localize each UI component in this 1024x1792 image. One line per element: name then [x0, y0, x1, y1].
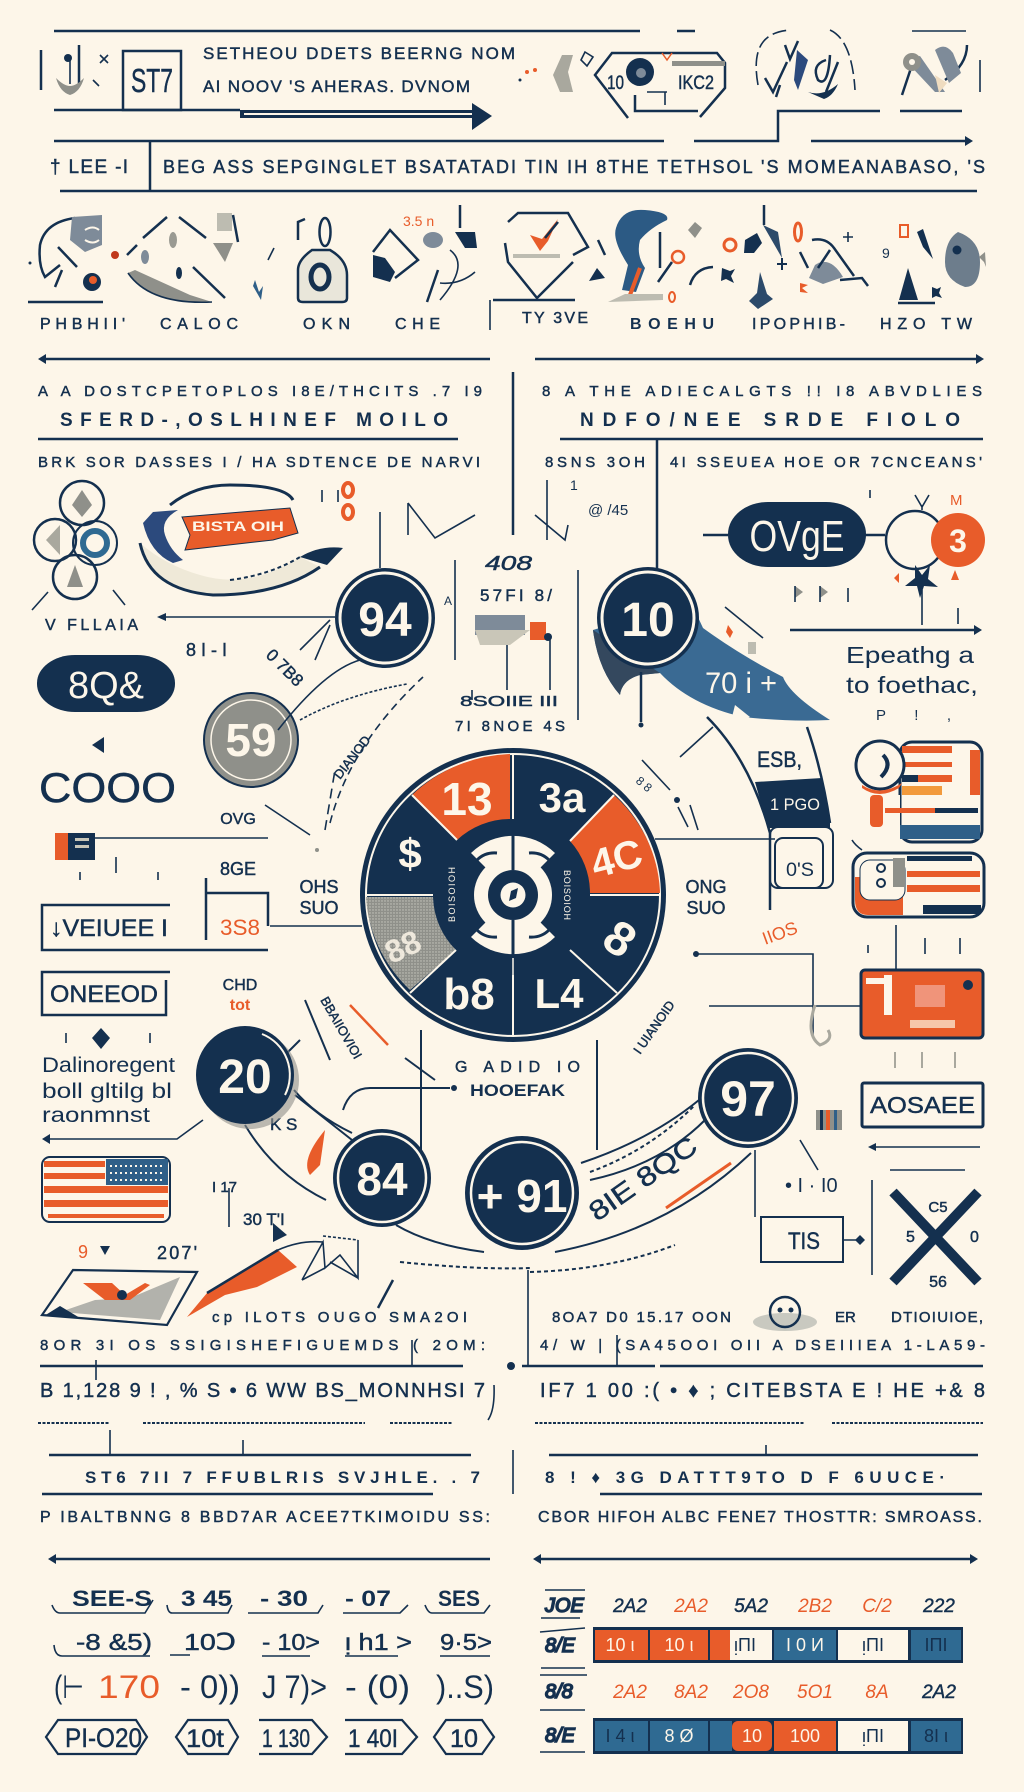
number circle: 84: [333, 1129, 431, 1227]
lower paragraph rows: 8 ! ♦ 3G DATTT9TO D F 6UUCE·: [545, 1468, 945, 1487]
wheel chart: [360, 748, 666, 1042]
lower paragraph rows: 4/ W | (SA45OOI OII A DSEIIIEA 1-LA59-: [540, 1337, 985, 1354]
number circle: 91: + 91: [477, 1170, 567, 1222]
row icons: JOE: [544, 1595, 585, 1617]
icon labels: OKN: [303, 316, 350, 333]
header labels 2: 8A: [865, 1682, 889, 1703]
icon: diamond: 3.5 n: [403, 213, 434, 229]
text: Epeathg: P ! ,: [876, 707, 951, 724]
table: left values: 10: [450, 1725, 478, 1753]
header labels 2: 5O1: [797, 1682, 833, 1703]
number circle: 10: [597, 567, 699, 728]
wheel numbers: 4C: [586, 831, 647, 887]
illustration: orange bird: [187, 1223, 393, 1317]
icon: circle cluster: [32, 481, 138, 634]
header labels 1: 5A2: [734, 1596, 768, 1617]
section headings: A A DOSTCPETOPLOS I8E/THCITS .7 I9: [38, 383, 482, 400]
blue blade: [593, 600, 830, 725]
illustration: center machine: 8SOIIE III: [460, 693, 558, 710]
small orange rings: 57FI 8/: [480, 586, 552, 605]
small flag icon: [55, 833, 158, 880]
arrow: lower left: [42, 1120, 203, 1144]
table: left values: PI-O20: [65, 1723, 142, 1753]
icon: X: 56: [929, 1274, 947, 1291]
label: orange note: IIOS: [760, 918, 800, 949]
center label: HOOEFAK: [470, 1081, 566, 1100]
row 3: 170: [98, 1669, 160, 1705]
icon: figure: [690, 205, 868, 309]
bar 2: 8I ι: [924, 1726, 948, 1746]
bar 1: 10 ι: [664, 1635, 694, 1655]
labels: OHS SUO: [299, 877, 727, 918]
arc labels: K S: [270, 1115, 297, 1134]
row 1: [52, 1586, 490, 1613]
row 3: J 7)>: [262, 1669, 327, 1705]
orange value bracket: 8GE: [220, 859, 256, 879]
small orange rings: 408: [485, 553, 532, 575]
text: paragraph: raonmnst: [42, 1104, 150, 1127]
lower paragraph rows: P IBALTBNNG 8 BBD7AR ACEE7TKIMOIDU SS:: [40, 1509, 490, 1526]
hub: BOISOIOH: [562, 870, 572, 920]
number circle: 94: [335, 568, 435, 668]
row 2: ᴉ h1 >: [345, 1629, 412, 1655]
label: cluster: V FLLAIA: [45, 617, 138, 634]
icon row: [28, 205, 986, 333]
row 2: 9·5>: [440, 1629, 492, 1655]
icon: gear figure: 9: [882, 245, 890, 261]
row 3: )..S): [436, 1669, 494, 1705]
number circle: 10: 10: [621, 594, 675, 647]
bar 2: 10: [742, 1726, 762, 1746]
icon: anchor: [41, 45, 108, 95]
icon labels: PHBHII': [40, 316, 125, 333]
card: top: [856, 741, 982, 842]
heading row left: B 1,128 9 ! , % S • 6 WW BS_MONNHSI 7: [40, 1380, 485, 1402]
lower paragraph rows: [38, 1270, 985, 1564]
header labels 1: 2A2: [673, 1596, 708, 1617]
arc labels: BBAIIOVIOI: [317, 994, 365, 1062]
number circle: 97: [698, 1048, 798, 1148]
small stripes: [816, 1110, 842, 1130]
small orange rings: @ /45: [588, 502, 628, 519]
number circle: 59: 59: [225, 714, 277, 766]
intro row: BEG ASS SEPGINGLET BSATATADI TIN IH 8THE TETHSOL 'S MOMEANABASO, 'S: [163, 157, 985, 177]
icon: face: [753, 1297, 817, 1331]
icon: X: 0: [970, 1229, 979, 1246]
wheel numbers: 8: [593, 910, 645, 969]
labels: OHS SUO: SUO: [686, 898, 726, 918]
lower paragraph rows: ST6 7II 7 FFUBLRIS SVJHLE. . 7: [85, 1468, 480, 1487]
header labels 1: 2B2: [797, 1596, 832, 1617]
lower paragraph rows: CBOR HIFOH ALBC FENE7 THOSTTR: SMROASS.: [538, 1509, 982, 1526]
lower left texts: [78, 1179, 285, 1263]
icon: orange 3: 3: [949, 523, 967, 559]
row icons: 8/E: [545, 1725, 576, 1747]
label: CHD: CHD: [223, 977, 257, 994]
text: Epeathg: [846, 642, 978, 724]
header text: [203, 44, 515, 96]
lower paragraph rows: ER: [835, 1309, 856, 1326]
orange segment right: [570, 795, 660, 893]
icon: hexagon badge: 10: [607, 73, 624, 94]
label: 8-1: 0 7B8: [262, 645, 307, 690]
text: dots: • I · I0: [785, 1175, 838, 1197]
box: AOSAEE: AOSAEE: [870, 1092, 975, 1118]
orange segment: [412, 754, 510, 840]
wheel numbers: [379, 773, 647, 1019]
card: bottom: [853, 853, 984, 917]
section headings: 8 A THE ADIECALGTS !! I8 ABVDLIES: [542, 383, 982, 400]
box: ONEEOD: ONEEOD: [50, 981, 158, 1008]
heading right: NDFO/NEE SRDE FIOLO: [580, 410, 960, 431]
badge: ST7: ST7: [131, 62, 173, 99]
bar 1: [593, 1627, 963, 1663]
box: VEIUEE: [42, 905, 268, 950]
bar 2: 100: [790, 1726, 820, 1746]
arrow: double: [240, 103, 492, 130]
small orange rings: 1: [570, 477, 578, 493]
row icons: 8/E: [545, 1635, 576, 1657]
wheel numbers: L4: [534, 970, 584, 1017]
arc labels: I UIANOID: [630, 998, 678, 1057]
icon: diamond marker: [66, 1028, 150, 1049]
text: paragraph: [42, 1054, 175, 1127]
text: paragraph: Dalinoregent: [42, 1054, 175, 1077]
arrow: from 94: [157, 613, 335, 621]
row 2: 10Ↄ: [184, 1629, 236, 1655]
orange value bracket: 3S8: [220, 915, 260, 940]
row icons: 8/8: [545, 1681, 573, 1703]
bar 1: ᴉПI: [734, 1635, 756, 1655]
row 1: - 07: [345, 1586, 391, 1611]
header text: AI NOOV 'S AHERAS. DVNOM: [203, 77, 470, 96]
wheel numbers: $: [398, 830, 422, 877]
connector lines: [95, 727, 775, 926]
orange value bracket: [206, 859, 268, 940]
icon: diamond: [373, 205, 477, 302]
wheel numbers: 13: [441, 773, 493, 825]
bar 2: [593, 1718, 963, 1754]
row 3: - (0): [345, 1669, 410, 1705]
bar 1: I 0 И: [786, 1635, 824, 1655]
text: Epeathg: Epeathg a: [846, 642, 974, 668]
icon labels: TY 3VE: [522, 310, 588, 327]
icon: net: [111, 213, 274, 302]
icon: head: [28, 215, 103, 302]
lower left texts: 30 T'I: [243, 1210, 285, 1229]
box: AOSAEE: [862, 1083, 983, 1127]
text: COOO: COOO: [39, 764, 176, 811]
row 2: - 10>: [262, 1629, 320, 1655]
label: 8-1: DIANOD: [331, 733, 373, 782]
labels: OHS SUO: SUO: [299, 898, 339, 918]
badge: ST7: [123, 51, 181, 110]
right stack: ESB: 1 PGO: [770, 795, 820, 814]
right flag icons: [852, 741, 984, 917]
gray squiggle: [811, 1005, 955, 1068]
lower paragraph rows: cp ILOTS OUGO SMA2OI: [212, 1309, 467, 1326]
bar 2: 8 Ø: [664, 1726, 694, 1746]
row 1: - 30: [260, 1586, 308, 1611]
icon labels: CALOC: [160, 316, 238, 333]
icon: ribbon: [902, 31, 980, 95]
bar 1: 10 ι: [605, 1635, 635, 1655]
right stack: ESB: [707, 717, 833, 910]
table: right colored bars: [540, 1590, 963, 1754]
right stack: ESB: 0'S: [786, 860, 814, 881]
row 4: [46, 1720, 494, 1754]
header panel: [41, 30, 985, 191]
label: 8-1: 8 I - I: [186, 640, 227, 660]
number circle: 20: [196, 1026, 299, 1129]
pill: SQ: [37, 655, 175, 712]
section headings: 8SNS 3OH: [545, 454, 645, 471]
right stack: ESB: ESB,: [757, 747, 802, 772]
arc labels: [270, 994, 703, 1227]
text: Epeathg: to foethac,: [846, 672, 978, 698]
pill: ONE: OVgE: [750, 512, 844, 561]
illustration: center machine: [455, 615, 565, 735]
icon: hexagon check: [490, 213, 588, 330]
label: CHD: [223, 977, 257, 1014]
row icons: [540, 1590, 587, 1752]
label: orange note: [693, 918, 960, 1035]
center label: [451, 1059, 580, 1100]
header labels 1: [612, 1596, 955, 1617]
row 3: (⊢: [54, 1669, 84, 1705]
header labels 2: 2A2: [612, 1682, 647, 1703]
wheel numbers: 88: [379, 923, 427, 971]
lower paragraph rows: 8OA7 D0 15.17 OON: [552, 1309, 731, 1326]
bar 2: I 4 ι: [605, 1726, 635, 1746]
icon: X: 5: [906, 1229, 915, 1246]
arrow: right: [790, 586, 982, 635]
number circle: 94: 94: [358, 594, 412, 647]
wheel numbers: 3a: [539, 774, 586, 821]
icon: hexagon badge: IKC2: [678, 73, 714, 94]
lower left texts: I 17: [212, 1179, 237, 1196]
box: VEIUEE: ↓VEIUEE I: [50, 915, 168, 942]
connector lines: 8 8: [633, 774, 655, 795]
table: left values: 1 130: [262, 1725, 310, 1753]
icon labels: CHE: [395, 316, 440, 333]
row 1: SEE-S: [72, 1586, 152, 1611]
section headings: [38, 354, 984, 568]
icon: orange 3: [870, 490, 985, 625]
row 2: -8 &5): [76, 1629, 152, 1655]
header labels 2: 2A2: [921, 1682, 956, 1703]
pill: ONE: [703, 490, 985, 625]
icon labels: BOEHU: [630, 316, 714, 333]
row 3: [54, 1669, 494, 1705]
header labels 1: 222: [922, 1596, 955, 1617]
arc labels: 8IE 8QC: [583, 1131, 703, 1227]
flag: [42, 1157, 170, 1222]
icon: hexagon badge: [518, 52, 725, 118]
text: paragraph: boll gltilg bl: [42, 1080, 172, 1103]
icon: X: C5: [928, 1199, 948, 1216]
bar 1: ᴉПI: [862, 1635, 884, 1655]
icon: bottle: [298, 218, 347, 302]
number circle: 97: 97: [720, 1071, 776, 1127]
header text: SETHEOU DDETS BEERNG NOM: [203, 44, 515, 63]
icon: orange 3: M: [950, 492, 962, 509]
icon labels: HZO TW: [880, 316, 973, 333]
header labels 2: [612, 1682, 956, 1703]
heading left: SFERD-,OSLHINEF MOILO: [60, 410, 448, 431]
section headings: BRK SOR DASSES I / HA SDTENCE DE NARVI: [38, 454, 480, 471]
table: left values: [46, 1586, 494, 1754]
box: ONEEOD: [42, 972, 170, 1015]
header labels 1: 2A2: [612, 1596, 647, 1617]
header labels 2: 8A2: [674, 1682, 708, 1703]
row 3: - 0)): [180, 1669, 240, 1705]
header labels 2: 2O8: [732, 1682, 769, 1703]
label: CHD: tot: [230, 997, 251, 1014]
arcs lower: [245, 1000, 751, 1272]
labels: OHS SUO: ONG: [685, 877, 727, 897]
icon: arrow left: [92, 737, 104, 753]
lower left texts: 207': [157, 1243, 197, 1263]
arrow: left right column: [800, 1140, 980, 1275]
number circle: 84: 84: [356, 1153, 408, 1205]
orange box: [709, 970, 983, 1038]
lower paragraph rows: DTIOIUIOE,: [891, 1309, 983, 1326]
number circle: 59: [204, 693, 298, 787]
icon: X: [893, 1192, 979, 1291]
number circle: 91: [465, 1136, 579, 1250]
header labels 1: C/2: [862, 1596, 892, 1617]
box: TIS: TIS: [788, 1228, 820, 1255]
row 1: SES: [438, 1586, 480, 1611]
label: OVG: OVG: [220, 811, 256, 828]
illustration: orange banner: BISTA OIH: [192, 518, 284, 534]
icon: blue profile: [589, 210, 702, 302]
center label: G ADID IO: [455, 1059, 580, 1076]
label: 8-1: [186, 620, 423, 823]
hub: BOISOIOH: [447, 867, 457, 922]
number circle: 20: 20: [218, 1051, 272, 1104]
lower left texts: 9: [78, 1242, 88, 1262]
intro row: † LEE -I: [50, 157, 128, 178]
row 1: 3 45: [181, 1586, 232, 1611]
icon labels: [40, 310, 973, 333]
row 2: [54, 1629, 492, 1656]
small orange rings: A: [444, 594, 452, 608]
icon labels: IPOPHIB-: [752, 316, 845, 333]
heading row right: IF7 1 00 :( • ♦ ; CITEBSTA E ! HE +& 8: [540, 1380, 985, 1402]
wheel numbers: b8: [443, 970, 495, 1019]
icon: gear figure: [882, 225, 986, 303]
bar 2: ᴉПI: [862, 1726, 884, 1746]
box: TIS: [755, 1150, 865, 1262]
illustration: orange banner: [140, 485, 343, 595]
illustration: map: [42, 1270, 197, 1325]
icon: pen sketch: [756, 30, 855, 99]
gray segment: [366, 897, 456, 990]
table: left values: 1 40I: [348, 1725, 398, 1753]
lower paragraph rows: 8OR 3I OS SSIGISHEFIGUEMDS ( 2OM:: [40, 1337, 485, 1354]
small orange rings: [322, 477, 628, 720]
blue blade: 70 i +: [705, 667, 777, 700]
hub: [447, 835, 572, 975]
pill: SQ: 8Q&: [68, 665, 144, 707]
labels: OHS SUO: OHS: [299, 877, 339, 897]
illustration: center machine: 7I 8NOE 4S: [455, 718, 565, 735]
table: left values: 10t: [186, 1725, 224, 1753]
bar 1: IПI: [925, 1635, 947, 1655]
section headings: 4I SSEUEA HOE OR 7CNCEANS': [670, 454, 982, 471]
